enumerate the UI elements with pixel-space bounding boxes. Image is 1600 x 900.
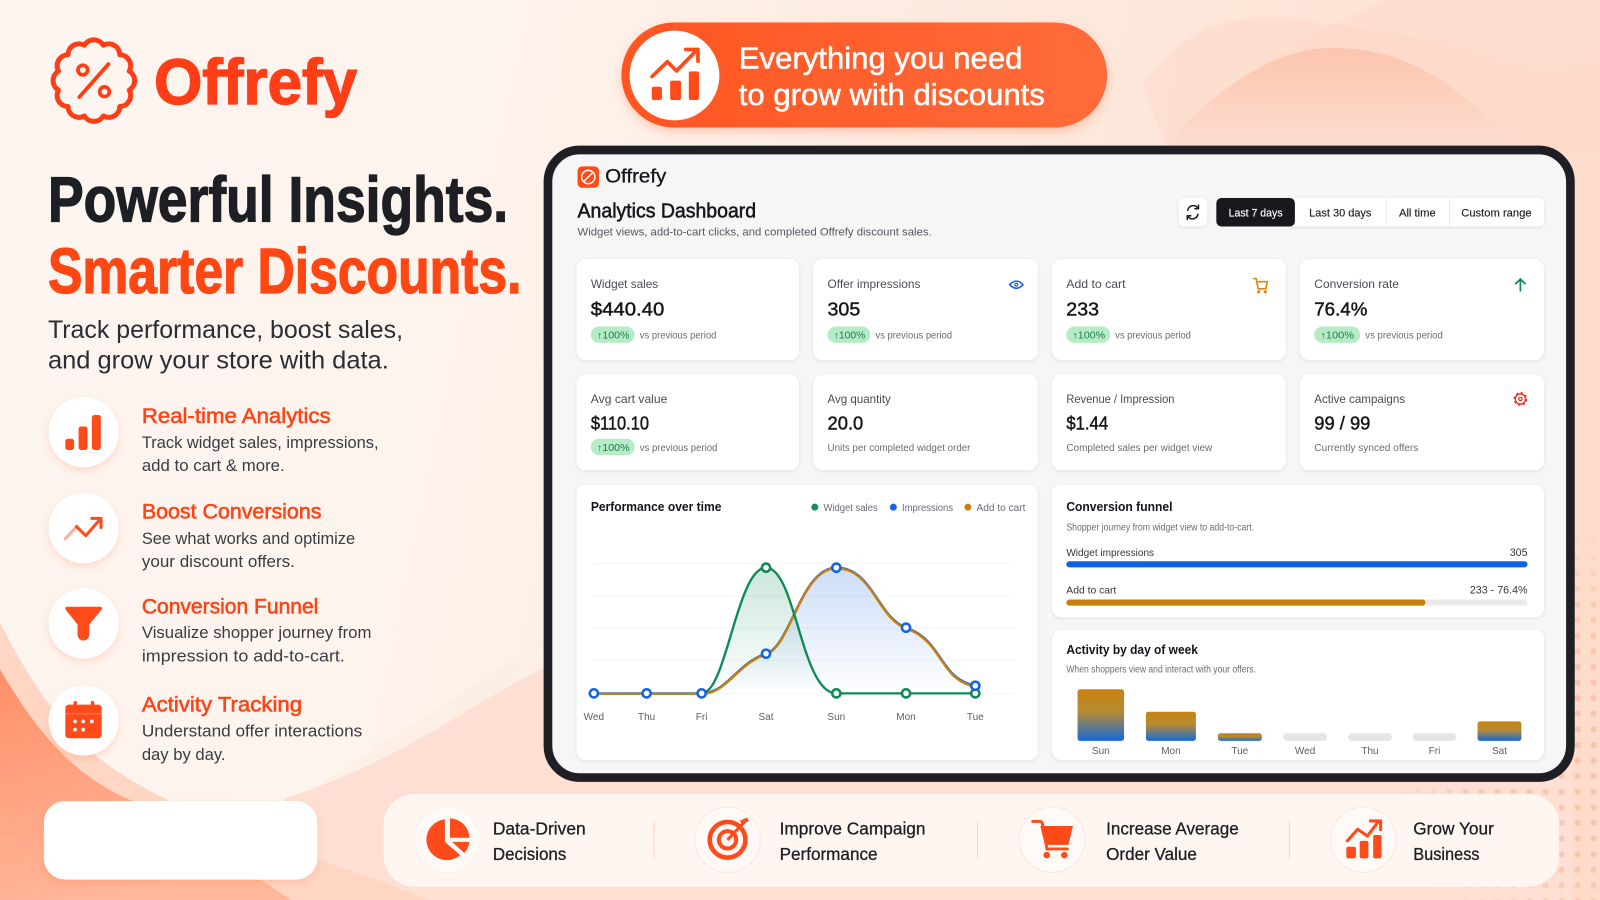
bar labels: Mon bbox=[1161, 746, 1181, 757]
x axis labels: Mon bbox=[896, 712, 916, 723]
card: Offer impressions: vs previous period bbox=[876, 330, 952, 341]
benefit: Data-Driven Decisions: Data-Driven bbox=[493, 819, 586, 839]
card: Avg cart value: $110.10 bbox=[591, 413, 649, 434]
card: Add to cart: 233 bbox=[1066, 298, 1099, 319]
benefit: Data-Driven Decisions bbox=[415, 807, 586, 872]
feature: Real-time Analytics bbox=[48, 397, 379, 475]
icon: up arrow bbox=[1516, 279, 1525, 291]
icon: funnel bbox=[65, 607, 102, 641]
headline: Powerful Insights. bbox=[48, 163, 508, 235]
card: Add to cart: vs previous period bbox=[1115, 330, 1191, 341]
card: Revenue / Impression: Revenue / Impression bbox=[1066, 393, 1174, 406]
feature: Conversion Funnel bbox=[48, 588, 371, 666]
dashboard device frame bbox=[548, 150, 1570, 778]
feature: Real-time Analytics: Track widget sales, impressions, bbox=[142, 433, 379, 452]
headline bbox=[48, 163, 521, 307]
benefit: Increase Average Order Value: Order Value bbox=[1106, 844, 1197, 864]
x axis labels: Wed bbox=[584, 712, 604, 723]
icon: calendar bbox=[65, 701, 102, 738]
icon: pie chart bbox=[426, 818, 469, 860]
subheading: Track performance, boost sales, bbox=[48, 316, 403, 344]
icon: cart bbox=[1033, 821, 1073, 858]
chart legend: Add to cart bbox=[977, 503, 1026, 514]
card: Offer impressions: ↑100% bbox=[834, 330, 865, 341]
funnel bar: widget impressions: 305 bbox=[1510, 547, 1528, 559]
benefit: Grow Your Business: Grow Your bbox=[1413, 819, 1494, 839]
card: Offer impressions: Offer impressions bbox=[828, 278, 921, 291]
banner pill: to grow with discounts bbox=[739, 78, 1045, 112]
dashboard logo: Offrefy bbox=[605, 166, 667, 188]
chart legend bbox=[811, 503, 1026, 514]
card: Add to cart: ↑100% bbox=[1072, 330, 1105, 341]
x axis labels: Fri bbox=[696, 712, 707, 723]
card: Conversion rate: ↑100% bbox=[1320, 330, 1354, 341]
card: Add to cart bbox=[1052, 259, 1286, 360]
card: Widget sales: $440.40 bbox=[591, 298, 664, 319]
bar labels: Tue bbox=[1231, 746, 1249, 757]
benefit: Increase Average Order Value: Increase Average bbox=[1106, 819, 1239, 839]
panel: conversion funnel: Conversion funnel bbox=[1066, 499, 1172, 514]
bar labels: Wed bbox=[1295, 746, 1315, 757]
dashboard title bbox=[578, 200, 932, 239]
panel: activity by day of week: When shoppers view and interact with your offers. bbox=[1066, 664, 1256, 675]
card: Active campaigns: Active campaigns bbox=[1314, 393, 1405, 406]
chart legend: Impressions bbox=[902, 503, 953, 514]
card: Avg cart value: ↑100% bbox=[597, 443, 630, 454]
benefit: Improve Campaign Performance bbox=[695, 807, 926, 872]
banner text: Everything you need bbox=[739, 41, 1022, 75]
icon: small logo bbox=[578, 166, 599, 188]
date range tabs: Custom range bbox=[1461, 207, 1532, 219]
feature: Boost Conversions: See what works and optimize bbox=[142, 529, 355, 548]
bar labels bbox=[1092, 746, 1507, 757]
subheading: and grow your store with data. bbox=[48, 346, 389, 374]
card: Conversion rate bbox=[1300, 259, 1544, 360]
feature: Boost Conversions bbox=[48, 493, 355, 571]
card: Conversion rate: Conversion rate bbox=[1314, 278, 1399, 291]
dashboard title: Widget views, add-to-cart clicks, and completed Offrefy discount sales. bbox=[578, 227, 932, 239]
feature: Conversion Funnel: impression to add-to-cart. bbox=[142, 647, 345, 666]
dashboard title: Analytics Dashboard bbox=[578, 200, 756, 222]
feature: Real-time Analytics: add to cart & more. bbox=[142, 456, 285, 475]
x axis labels bbox=[584, 712, 984, 723]
icon: bar chart bbox=[65, 415, 101, 450]
card: Avg quantity: Units per completed widget order bbox=[828, 443, 971, 454]
bar chart bbox=[1078, 689, 1521, 741]
icon: cart bbox=[1254, 279, 1267, 293]
headline: Smarter Discounts. bbox=[48, 235, 521, 307]
refresh button bbox=[1179, 198, 1207, 227]
icon: target bbox=[710, 819, 748, 858]
funnel bar: add to cart bbox=[1066, 584, 1528, 606]
x axis labels: Sun bbox=[827, 712, 845, 723]
funnel bar: add to cart: 233 - 76.4% bbox=[1470, 584, 1528, 596]
benefit: Improve Campaign Performance: Performance bbox=[780, 844, 878, 864]
feature: Activity Tracking: day by day. bbox=[142, 745, 226, 764]
card: Avg cart value bbox=[577, 374, 799, 470]
bar labels: Thu bbox=[1361, 746, 1379, 757]
panel: performance over time chart bbox=[577, 485, 1038, 760]
card: Revenue / Impression: $1.44 bbox=[1066, 413, 1108, 434]
bar labels: Sat bbox=[1492, 746, 1507, 757]
card: Active campaigns: 99 / 99 bbox=[1314, 413, 1370, 434]
card: Avg cart value: vs previous period bbox=[640, 443, 717, 454]
icon: gear bbox=[1514, 393, 1527, 405]
card: Widget sales: vs previous period bbox=[640, 330, 716, 341]
panel: conversion funnel: Shopper journey from widget view to add-to-cart. bbox=[1066, 523, 1254, 534]
benefit: Grow Your Business: Business bbox=[1413, 844, 1480, 864]
feature: Conversion Funnel: Visualize shopper journey from bbox=[142, 623, 371, 642]
card: Widget sales: Widget sales bbox=[591, 278, 658, 291]
dashboard logo bbox=[578, 166, 667, 188]
card: Widget sales bbox=[577, 259, 799, 360]
icon: growth chart in white circle bbox=[630, 31, 719, 120]
card: Avg quantity: Avg quantity bbox=[828, 393, 891, 406]
card: Revenue / Impression bbox=[1052, 374, 1286, 470]
feature: Activity Tracking bbox=[48, 685, 362, 764]
panel: activity by day of week: Activity by day of week bbox=[1066, 642, 1199, 657]
logo: Offrefy badge and wordmark bbox=[53, 40, 357, 121]
panel: activity by day of week bbox=[1052, 630, 1544, 760]
card: Revenue / Impression: Completed sales per widget view bbox=[1066, 443, 1213, 454]
card: Avg quantity bbox=[813, 374, 1038, 470]
card: Avg cart value: Avg cart value bbox=[591, 393, 667, 406]
benefit: Data-Driven Decisions: Decisions bbox=[493, 844, 566, 864]
benefit: Improve Campaign Performance: Improve Campaign bbox=[780, 819, 926, 839]
bar labels: Sun bbox=[1092, 746, 1110, 757]
x axis labels: Thu bbox=[638, 712, 655, 723]
benefit: Increase Average Order Value bbox=[1019, 807, 1239, 872]
chart legend: Widget sales bbox=[823, 503, 878, 514]
funnel bar: widget impressions bbox=[1066, 547, 1528, 567]
feature: Boost Conversions: your discount offers. bbox=[142, 552, 295, 571]
date range tabs: All time bbox=[1399, 207, 1436, 219]
card: Avg quantity: 20.0 bbox=[828, 413, 863, 434]
funnel bar: add to cart: Add to cart bbox=[1066, 585, 1116, 596]
funnel bar: widget impressions: Widget impressions bbox=[1066, 548, 1154, 559]
feature: Boost Conversions: Boost Conversions bbox=[142, 499, 321, 523]
date range tabs: Last 30 days bbox=[1309, 207, 1372, 219]
feature: Real-time Analytics: Real-time Analytics bbox=[142, 404, 331, 428]
card: Add to cart: Add to cart bbox=[1066, 278, 1126, 291]
panel: performance over time chart: Performance over time bbox=[591, 499, 721, 514]
card: Active campaigns: Currently synced offers bbox=[1314, 443, 1418, 454]
bottom benefits bar bbox=[384, 794, 1559, 887]
x axis labels: Sat bbox=[759, 712, 774, 723]
card: Conversion rate: vs previous period bbox=[1365, 330, 1443, 341]
card: Widget sales: ↑100% bbox=[597, 330, 630, 341]
icon: percent badge bbox=[53, 40, 135, 121]
benefit: Grow Your Business bbox=[1331, 807, 1494, 872]
wordmark: Offrefy bbox=[154, 46, 357, 118]
icon: trend arrow bbox=[65, 518, 101, 539]
banner pill bbox=[621, 22, 1107, 128]
card: Conversion rate: 76.4% bbox=[1314, 298, 1368, 319]
panel: conversion funnel bbox=[1052, 485, 1544, 617]
feature: Activity Tracking: Activity Tracking bbox=[142, 693, 302, 717]
icon: eye bbox=[1010, 281, 1023, 288]
card: Active campaigns bbox=[1300, 374, 1544, 470]
blank white card bbox=[44, 801, 317, 880]
feature: Activity Tracking: Understand offer interactions bbox=[142, 722, 362, 741]
card: Offer impressions bbox=[813, 259, 1038, 360]
x axis labels: Tue bbox=[967, 712, 984, 723]
subheading bbox=[48, 316, 403, 374]
icon: growth chart bbox=[1346, 821, 1382, 858]
date range tabs: Last 7 days bbox=[1229, 207, 1283, 219]
bar labels: Fri bbox=[1429, 746, 1440, 757]
card: Offer impressions: 305 bbox=[828, 298, 860, 319]
date range tabs bbox=[1216, 198, 1544, 227]
feature: Conversion Funnel: Conversion Funnel bbox=[142, 594, 318, 618]
line chart curves bbox=[594, 568, 975, 694]
data point markers bbox=[590, 564, 979, 697]
